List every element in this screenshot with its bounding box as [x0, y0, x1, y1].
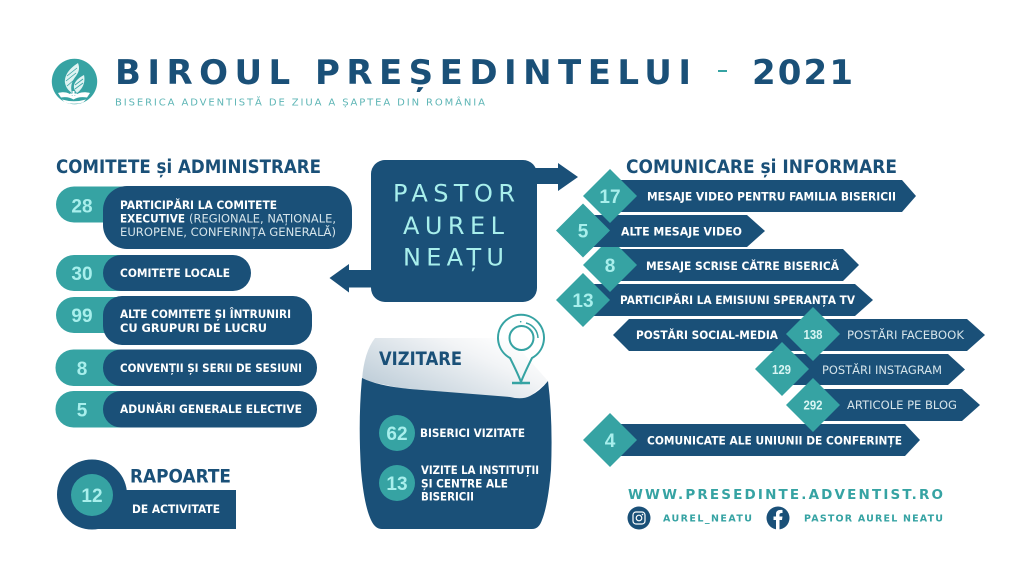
icon: instagram: [628, 506, 650, 530]
item: 13 emisiuni: [556, 273, 873, 327]
item: 5 adunari generale: [56, 391, 317, 428]
item: 8 mesaje scrise: 8: [605, 256, 615, 277]
item: 4 comunicate: COMUNICATE ALE UNIUNII DE CONFERINȚE: [647, 435, 902, 448]
item: 17 mesaje video: 17: [599, 187, 621, 208]
item: 8 conventii: 8: [77, 359, 87, 380]
item: 17 mesaje video: MESAJE VIDEO PENTRU FAMILIA BISERICII: [647, 191, 896, 204]
item: 28 participari la comitete executive: 28: [71, 196, 93, 218]
item: 292 articole pe blog: 292: [804, 398, 823, 412]
panel: vizitare: VIZITARE: [379, 349, 462, 370]
panel: pastor aurel neatu: [371, 160, 537, 302]
panel: comunicare list: [556, 169, 985, 467]
arrow: left: [330, 264, 380, 292]
icon: church logo: [52, 59, 97, 104]
panel: pastor aurel neatu: NEAȚU: [403, 244, 504, 272]
item: 13 vizite la institutii: [379, 464, 539, 504]
heading: comitete si administrare: COMITETE și ADMINISTRARE: [56, 157, 321, 178]
item: 62 biserici vizitate: 62: [386, 424, 408, 445]
item: 138 postari facebook: POSTĂRI FACEBOOK: [847, 329, 965, 342]
item: 8 conventii: CONVENȚII ȘI SERII DE SESIUNI: [120, 362, 302, 375]
item: 28 participari la comitete executive: [56, 186, 352, 249]
item: 99 alte comitete: CU GRUPURI DE LUCRU: [120, 322, 267, 335]
item: 28 participari la comitete executive: EUROPENE, CONFERINȚA GENERALĂ): [120, 226, 336, 239]
item: 13 vizite la institutii: 13: [386, 474, 408, 495]
title: BIROUL PREȘEDINTELUI: [115, 53, 691, 93]
icon: map pin: [498, 315, 544, 383]
panel: pastor aurel neatu: AUREL: [403, 212, 505, 240]
website url: WWW.PRESEDINTE.ADVENTIST.RO: [628, 487, 943, 503]
item: 30 comitete locale: COMITETE LOCALE: [120, 267, 230, 280]
item: 30 comitete locale: [56, 255, 251, 291]
item: 8 conventii: [56, 350, 317, 386]
item: 99 alte comitete: [56, 296, 312, 345]
item: 99 alte comitete: 99: [71, 306, 93, 327]
item: 129 postari instagram: 129: [772, 363, 791, 377]
panel: rapoarte: DE ACTIVITATE: [132, 503, 220, 516]
item: postari social-media: POSTĂRI SOCIAL-MEDIA: [636, 329, 778, 342]
arrow: right: [530, 163, 578, 191]
panel: rapoarte: RAPOARTE: [130, 467, 231, 488]
facebook handle: PASTOR AUREL NEATU: [804, 514, 943, 525]
item: 5 adunari generale: ADUNĂRI GENERALE ELECTIVE: [120, 403, 302, 416]
subtitle: BISERICA ADVENTISTĂ DE ZIUA A ȘAPTEA DIN ROMÂNIA: [115, 96, 485, 108]
panel: rapoarte: [57, 460, 236, 530]
item: 4 comunicate: [583, 413, 920, 467]
item: 5 adunari generale: 5: [77, 400, 88, 422]
item: 8 mesaje scrise: [583, 238, 859, 292]
item: 292 articole pe blog: ARTICOLE PE BLOG: [847, 399, 957, 412]
item: 5 alte mesaje: ALTE MESAJE VIDEO: [621, 226, 742, 238]
panel: vizitare: [360, 315, 552, 529]
item: 4 comunicate: 4: [605, 431, 616, 452]
item: 17 mesaje video: [583, 169, 916, 223]
item: 99 alte comitete: ALTE COMITETE ȘI ÎNTRUNIRI: [120, 308, 291, 321]
item: 28 participari la comitete executive: EXECUTIVE: [120, 212, 185, 226]
item: 292 articole pe blog: [786, 378, 980, 432]
item: 62 biserici vizitate: [379, 415, 525, 451]
title: 2021: [752, 53, 853, 93]
item: 13 vizite la institutii: ȘI CENTRE ALE: [421, 478, 508, 490]
item: 129 postari instagram: [755, 342, 965, 396]
item: 138 postari facebook: [786, 307, 965, 361]
item: 62 biserici vizitate: BISERICI VIZITATE: [420, 427, 525, 440]
panel: rapoarte: 12: [81, 486, 103, 507]
item: 13 vizite la institutii: VIZITE LA INSTITUȚII: [421, 464, 539, 477]
panel: pastor aurel neatu: PASTOR: [393, 180, 515, 208]
icon: facebook: [766, 506, 790, 530]
item: 13 vizite la institutii: BISERICII: [421, 490, 474, 504]
instagram handle: AUREL_NEATU: [663, 514, 752, 525]
item: 138 postari facebook: 138: [804, 328, 823, 342]
heading: comunicare si informare: COMUNICARE și INFORMARE: [626, 157, 897, 178]
item: 28 participari la comitete executive: (REGIONALE, NAȚIONALE,: [189, 212, 336, 226]
item: 28 participari la comitete executive: PARTICIPĂRI LA COMITETE: [120, 199, 277, 212]
panel: comitete list: [56, 186, 352, 428]
item: 5 alte mesaje: [556, 204, 765, 258]
item: 129 postari instagram: POSTĂRI INSTAGRAM: [822, 364, 942, 377]
item: 8 mesaje scrise: MESAJE SCRISE CĂTRE BISERICĂ: [646, 260, 839, 273]
item: 13 emisiuni: PARTICIPĂRI LA EMISIUNI SPERANȚA TV: [620, 294, 855, 307]
item: 5 alte mesaje: 5: [578, 222, 589, 242]
item: 30 comitete locale: 30: [71, 264, 93, 285]
item: 13 emisiuni: 13: [572, 291, 594, 312]
item: postari social-media: [613, 319, 985, 351]
